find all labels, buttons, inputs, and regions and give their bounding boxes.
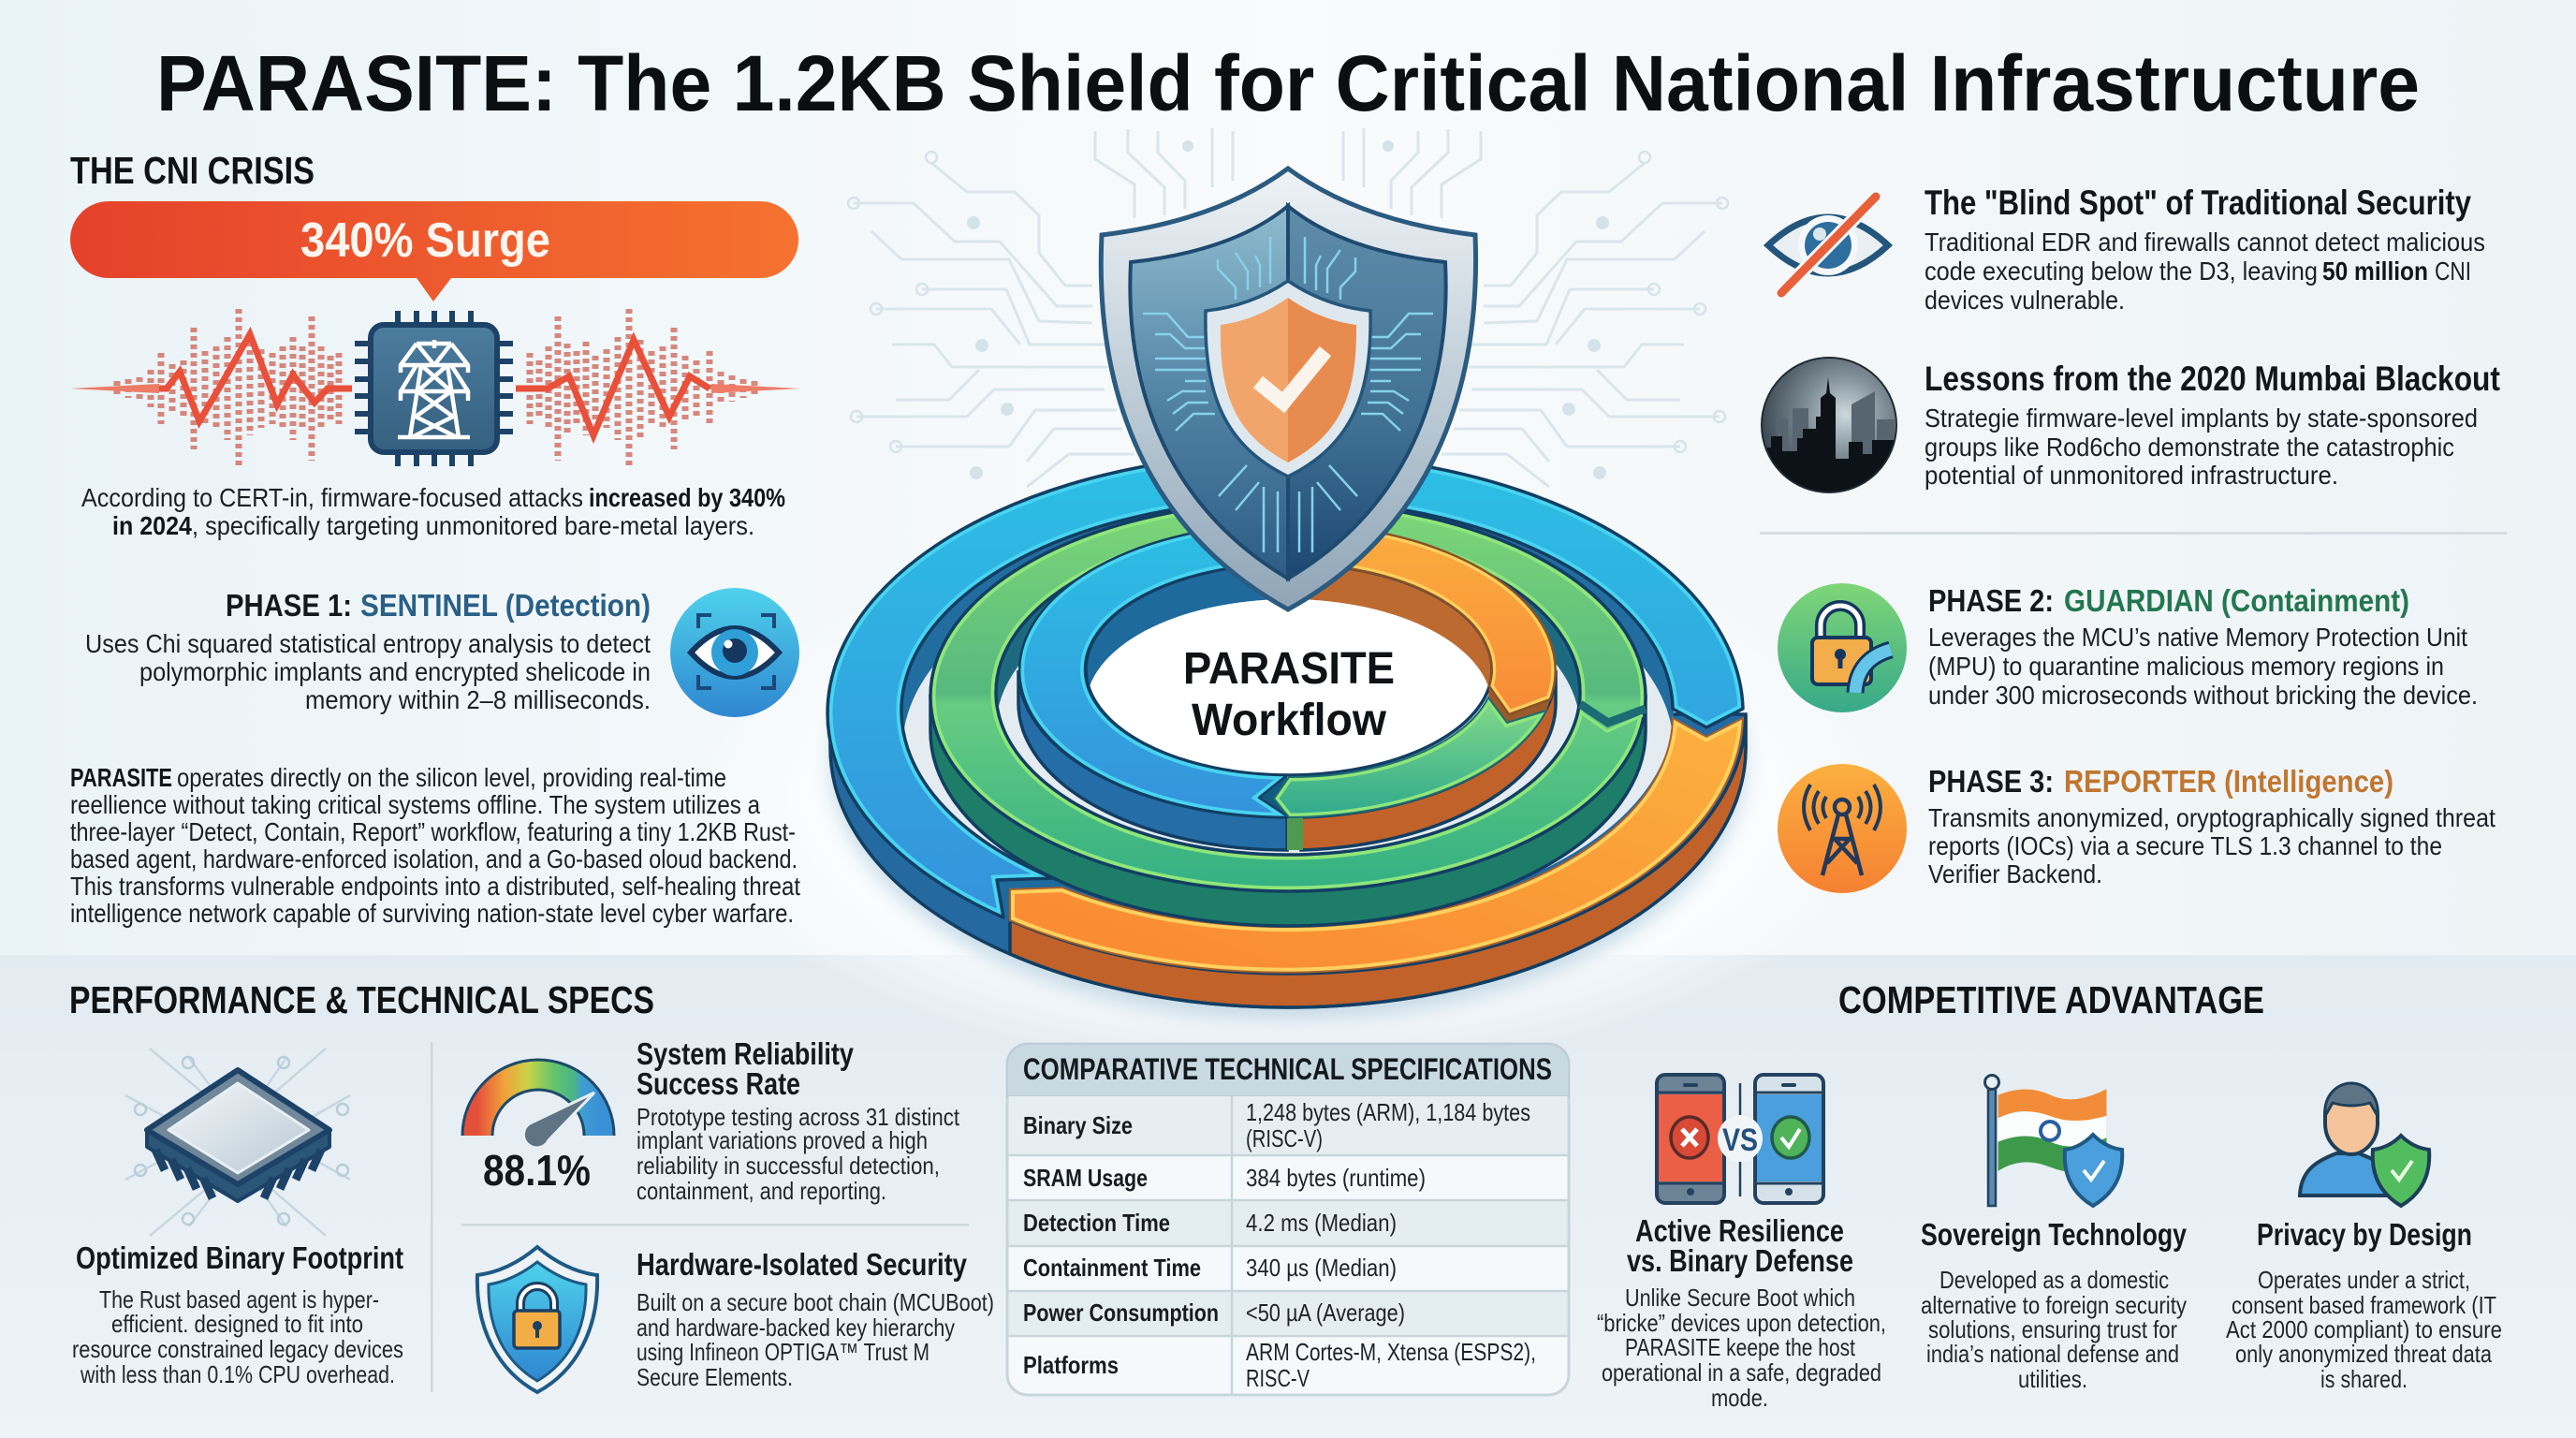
text: Mumbai blackout description: potential of unmonitored infrastructure. xyxy=(1925,461,2338,490)
text: reliability description: implant variations proved a high xyxy=(637,1126,928,1154)
icon: phones versus xyxy=(1657,1075,1823,1203)
chart: attack waveform left xyxy=(70,309,352,468)
title: PARASITE: The 1.2KB Shield for Critical National Infrastructure xyxy=(156,39,2420,127)
text: PARASITE summary paragraph: PARASITE xyxy=(70,763,172,792)
text: Mumbai blackout description xyxy=(1925,404,2478,490)
text: privacy description: consent based framework (IT xyxy=(2232,1291,2496,1319)
text: sovereign technology description: Developed as a domestic xyxy=(1939,1266,2169,1294)
icon: central shield xyxy=(1101,169,1476,609)
heading: phase 1: SENTINEL (Detection) xyxy=(360,588,651,623)
text: CERT-in statement: increased by 340% xyxy=(589,483,785,512)
heading: phase 2: GUARDIAN (Containment) xyxy=(2064,583,2409,618)
text: footprint description: resource constrained legacy devices xyxy=(72,1335,403,1363)
text: phase 3 description: Verifier Backend. xyxy=(1928,859,2102,888)
icon: person with privacy shield xyxy=(2300,1083,2429,1206)
text: phase 2 description: (MPU) to quarantine malicious memory regions in xyxy=(1928,652,2444,681)
table: comparative technical specifications xyxy=(1007,1044,1569,1395)
text: privacy description: is shared. xyxy=(2320,1365,2408,1393)
icon: power tower chip xyxy=(355,311,513,466)
heading: phase 1: PHASE 1: xyxy=(226,588,352,623)
heading: phase 2 xyxy=(1928,583,2409,618)
text: phase 3 description: Transmits anonymized, oryptographically signed threat xyxy=(1928,803,2496,832)
panel: performance and technical specs xyxy=(69,978,994,1392)
text: blind spot description: devices vulnerable. xyxy=(1925,286,2125,315)
icon: signal tower xyxy=(1778,764,1907,893)
panel: Mumbai blackout xyxy=(1760,358,2500,496)
text: hardware security description: using Infineon OPTIGA™ Trust M xyxy=(637,1338,929,1366)
icon: hardware lock shield xyxy=(477,1247,597,1392)
row: SRAM usage: SRAM Usage xyxy=(1023,1164,1148,1192)
text: PARASITE summary paragraph: three-layer “Detect, Contain, Report” workflow, featuring a tiny 1.2KB Rust- xyxy=(70,817,796,846)
text: active resilience description: operational in a safe, degraded xyxy=(1602,1358,1881,1387)
text: PARASITE summary paragraph: reellience without taking critical systems offline. The system utilizes a xyxy=(70,790,760,819)
icon: dark city skyline xyxy=(1760,358,1900,496)
text: phase 1 description: polymorphic implants and encrypted shelicode in xyxy=(139,657,651,686)
text: blind spot description: CNI xyxy=(2435,257,2471,286)
text: footprint description xyxy=(72,1285,403,1388)
heading: system reliability: System Reliability xyxy=(637,1036,855,1071)
text: phase 1 description xyxy=(85,629,651,714)
text: sovereign technology description xyxy=(1921,1266,2187,1393)
callout: 340% surge xyxy=(70,201,798,301)
icon: lock and memory pipe xyxy=(1778,583,1907,712)
label: PARASITE workflow xyxy=(1183,644,1395,745)
heading: phase 1 xyxy=(226,588,651,623)
text: blind spot description: Traditional EDR and firewalls cannot detect malicious xyxy=(1925,227,2485,257)
text: active resilience description xyxy=(1597,1284,1886,1412)
row: platforms: RISC-V xyxy=(1246,1364,1310,1392)
text: phase 1 description: Uses Chi squared statistical entropy analysis to detect xyxy=(85,629,651,658)
heading: phase 2: PHASE 2: xyxy=(1928,583,2054,618)
text: PARASITE summary paragraph: based agent, hardware-enforced isolation, and a Go-based oloud backend. xyxy=(70,844,798,873)
row: power consumption xyxy=(1023,1299,1405,1327)
text: reliability description: Prototype testing across 31 distinct xyxy=(637,1103,960,1131)
icon: binary footprint chip xyxy=(125,1049,350,1236)
panel: phase 2 guardian xyxy=(1778,583,2478,712)
row: platforms xyxy=(1023,1338,1536,1392)
chart: reliability gauge xyxy=(477,1075,599,1195)
text: phase 1 description: memory within 2–8 milliseconds. xyxy=(305,685,651,714)
heading: system reliability xyxy=(637,1036,855,1101)
text: phase 3 description xyxy=(1928,803,2496,888)
panel: phase 3 reporter xyxy=(1778,764,2496,893)
text: PARASITE summary paragraph xyxy=(70,763,800,928)
outer ring: detection and reporting xyxy=(827,454,1746,1007)
text: CERT-in statement: in 2024 xyxy=(112,511,192,540)
row: containment time: 340 µs (Median) xyxy=(1246,1254,1397,1282)
heading: hardware-isolated security: Hardware-Isolated Security xyxy=(637,1247,968,1282)
heading: system reliability: Success Rate xyxy=(637,1066,800,1101)
heading: sovereign technology: Sovereign Technology xyxy=(1921,1217,2188,1252)
text: reliability description: reliability in successful detection, xyxy=(637,1152,940,1180)
icon: crossed-out eye xyxy=(1768,197,1888,293)
row: binary size: Binary Size xyxy=(1023,1111,1133,1139)
text: active resilience description: Unlike Secure Boot which xyxy=(1625,1284,1855,1312)
row: platforms: ARM Cortes-M, Xtensa (ESPS2), xyxy=(1246,1338,1536,1366)
row: detection time: Detection Time xyxy=(1023,1209,1170,1237)
text: CERT-in statement: According to CERT-in, firmware-focused attacks xyxy=(81,483,583,512)
text: sovereign technology description: india’s national defense and xyxy=(1926,1340,2179,1368)
text: CERT-in statement: , specifically targeting unmonitored bare-metal layers. xyxy=(192,511,754,540)
text: privacy description: Operates under a strict, xyxy=(2258,1266,2470,1294)
heading: active resilience: vs. Binary Defense xyxy=(1627,1243,1853,1278)
label: PARASITE workflow: PARASITE xyxy=(1183,644,1395,694)
text: active resilience description: mode. xyxy=(1711,1384,1768,1412)
heading: competitive advantage: COMPETITIVE ADVANTAGE xyxy=(1838,978,2264,1021)
text: hardware security description: Secure Elements. xyxy=(637,1363,793,1391)
text: blind spot description: 50 million xyxy=(2322,257,2428,286)
text: footprint description: efficient. designed to fit into xyxy=(111,1310,363,1338)
row: binary size xyxy=(1023,1098,1530,1152)
row: containment time xyxy=(1023,1254,1397,1282)
row: power consumption: Power Consumption xyxy=(1023,1299,1219,1327)
icon: Indian flag with shield xyxy=(1984,1075,2122,1206)
text: privacy description: only anonymized threat data xyxy=(2235,1340,2492,1368)
heading: phase 3: PHASE 3: xyxy=(1928,764,2054,799)
text: privacy description xyxy=(2226,1266,2502,1393)
metric: 88.1%: 88.1% xyxy=(483,1146,591,1195)
text: hardware security description: Built on a secure boot chain (MCUBoot) xyxy=(637,1288,994,1316)
diagram: PARASITE workflow rings xyxy=(827,454,1746,1020)
heading: blind spot: The "Blind Spot" of Traditional Security xyxy=(1925,183,2471,222)
text: phase 2 description xyxy=(1928,623,2478,710)
text: phase 2 description: Leverages the MCU’s native Memory Protection Unit xyxy=(1928,623,2467,652)
icon: check mark xyxy=(1258,351,1325,403)
inner ring: three phases xyxy=(1018,523,1556,850)
row: detection time xyxy=(1023,1209,1397,1237)
text: sovereign technology description: utilities. xyxy=(2018,1365,2087,1393)
text: reliability description xyxy=(637,1103,960,1205)
text: Mumbai blackout description: Strategie firmware-level implants by state-sponsored xyxy=(1925,404,2478,433)
panel: phase 1 sentinel xyxy=(85,588,799,717)
table heading: COMPARATIVE TECHNICAL SPECIFICATIONS xyxy=(1023,1052,1552,1086)
middle ring: containment xyxy=(930,502,1646,926)
heading: active resilience: Active Resilience xyxy=(1635,1213,1844,1248)
text: phase 2 description: under 300 microseconds without bricking the device. xyxy=(1928,681,2478,710)
panel: blind spot xyxy=(1768,183,2485,315)
text: sovereign technology description: solutions, ensuring trust for xyxy=(1928,1315,2177,1343)
text: hardware security description: and hardware-backed key hierarchy xyxy=(637,1313,955,1342)
text: phase 3 description: reports (IOCs) via a secure TLS 1.3 channel to the xyxy=(1928,831,2442,860)
chart: attack waveform right xyxy=(516,309,800,468)
text: hardware security description xyxy=(637,1288,994,1391)
row: binary size: (RISC-V) xyxy=(1246,1124,1323,1152)
panel: the CNI crisis xyxy=(70,149,800,540)
shield circuit traces xyxy=(1143,237,1433,552)
callout: 340% surge: 340% Surge xyxy=(300,213,550,268)
heading: performance and technical specs: PERFORMANCE & TECHNICAL SPECS xyxy=(69,978,654,1021)
row: detection time: 4.2 ms (Median) xyxy=(1246,1209,1397,1237)
row: power consumption: <50 µA (Average) xyxy=(1246,1299,1405,1327)
heading: phase 3 xyxy=(1928,764,2393,799)
text: PARASITE summary paragraph: operates directly on the silicon level, providing real-time xyxy=(177,763,726,792)
heading: phase 3: REPORTER (Intelligence) xyxy=(2064,764,2393,799)
heading: active resilience xyxy=(1627,1213,1853,1278)
icon: phones versus: VS xyxy=(1722,1123,1758,1158)
text: blind spot description: code executing below the D3, leaving xyxy=(1925,257,2318,286)
heading: optimized binary footprint: Optimized Binary Footprint xyxy=(76,1240,403,1275)
row: SRAM usage xyxy=(1023,1164,1426,1192)
heading: privacy by design: Privacy by Design xyxy=(2257,1217,2472,1252)
text: active resilience description: “bricke” devices upon detection, xyxy=(1597,1309,1886,1337)
text: PARASITE summary paragraph: intelligence network capable of surviving nation-state level cyber warfare. xyxy=(70,899,794,928)
text: sovereign technology description: alternative to foreign security xyxy=(1921,1291,2187,1319)
heading: the CNI crisis: THE CNI CRISIS xyxy=(70,149,315,192)
text: footprint description: The Rust based agent is hyper- xyxy=(99,1285,379,1313)
background circuit traces xyxy=(848,128,1728,487)
row: containment time: Containment Time xyxy=(1023,1254,1201,1282)
text: footprint description: with less than 0.1% CPU overhead. xyxy=(80,1360,395,1388)
text: blind spot description xyxy=(1925,227,2485,315)
row: platforms: Platforms xyxy=(1023,1351,1119,1379)
text: privacy description: Act 2000 compliant) to ensure xyxy=(2226,1315,2502,1343)
text: active resilience description: PARASITE keepe the host xyxy=(1625,1333,1856,1361)
text: CERT-in statement xyxy=(81,483,785,540)
icon: scanning eye xyxy=(670,588,799,717)
label: PARASITE workflow: Workflow xyxy=(1192,696,1387,745)
text: reliability description: containment, and reporting. xyxy=(637,1177,886,1205)
row: binary size: 1,248 bytes (ARM), 1,184 bytes xyxy=(1246,1098,1530,1126)
text: PARASITE summary paragraph: This transforms vulnerable endpoints into a distributed, self-healing threat xyxy=(70,872,800,901)
panel: competitive advantage xyxy=(1597,978,2502,1412)
text: Mumbai blackout description: groups like Rod6cho demonstrate the catastrophic xyxy=(1925,433,2454,462)
row: SRAM usage: 384 bytes (runtime) xyxy=(1246,1164,1426,1192)
